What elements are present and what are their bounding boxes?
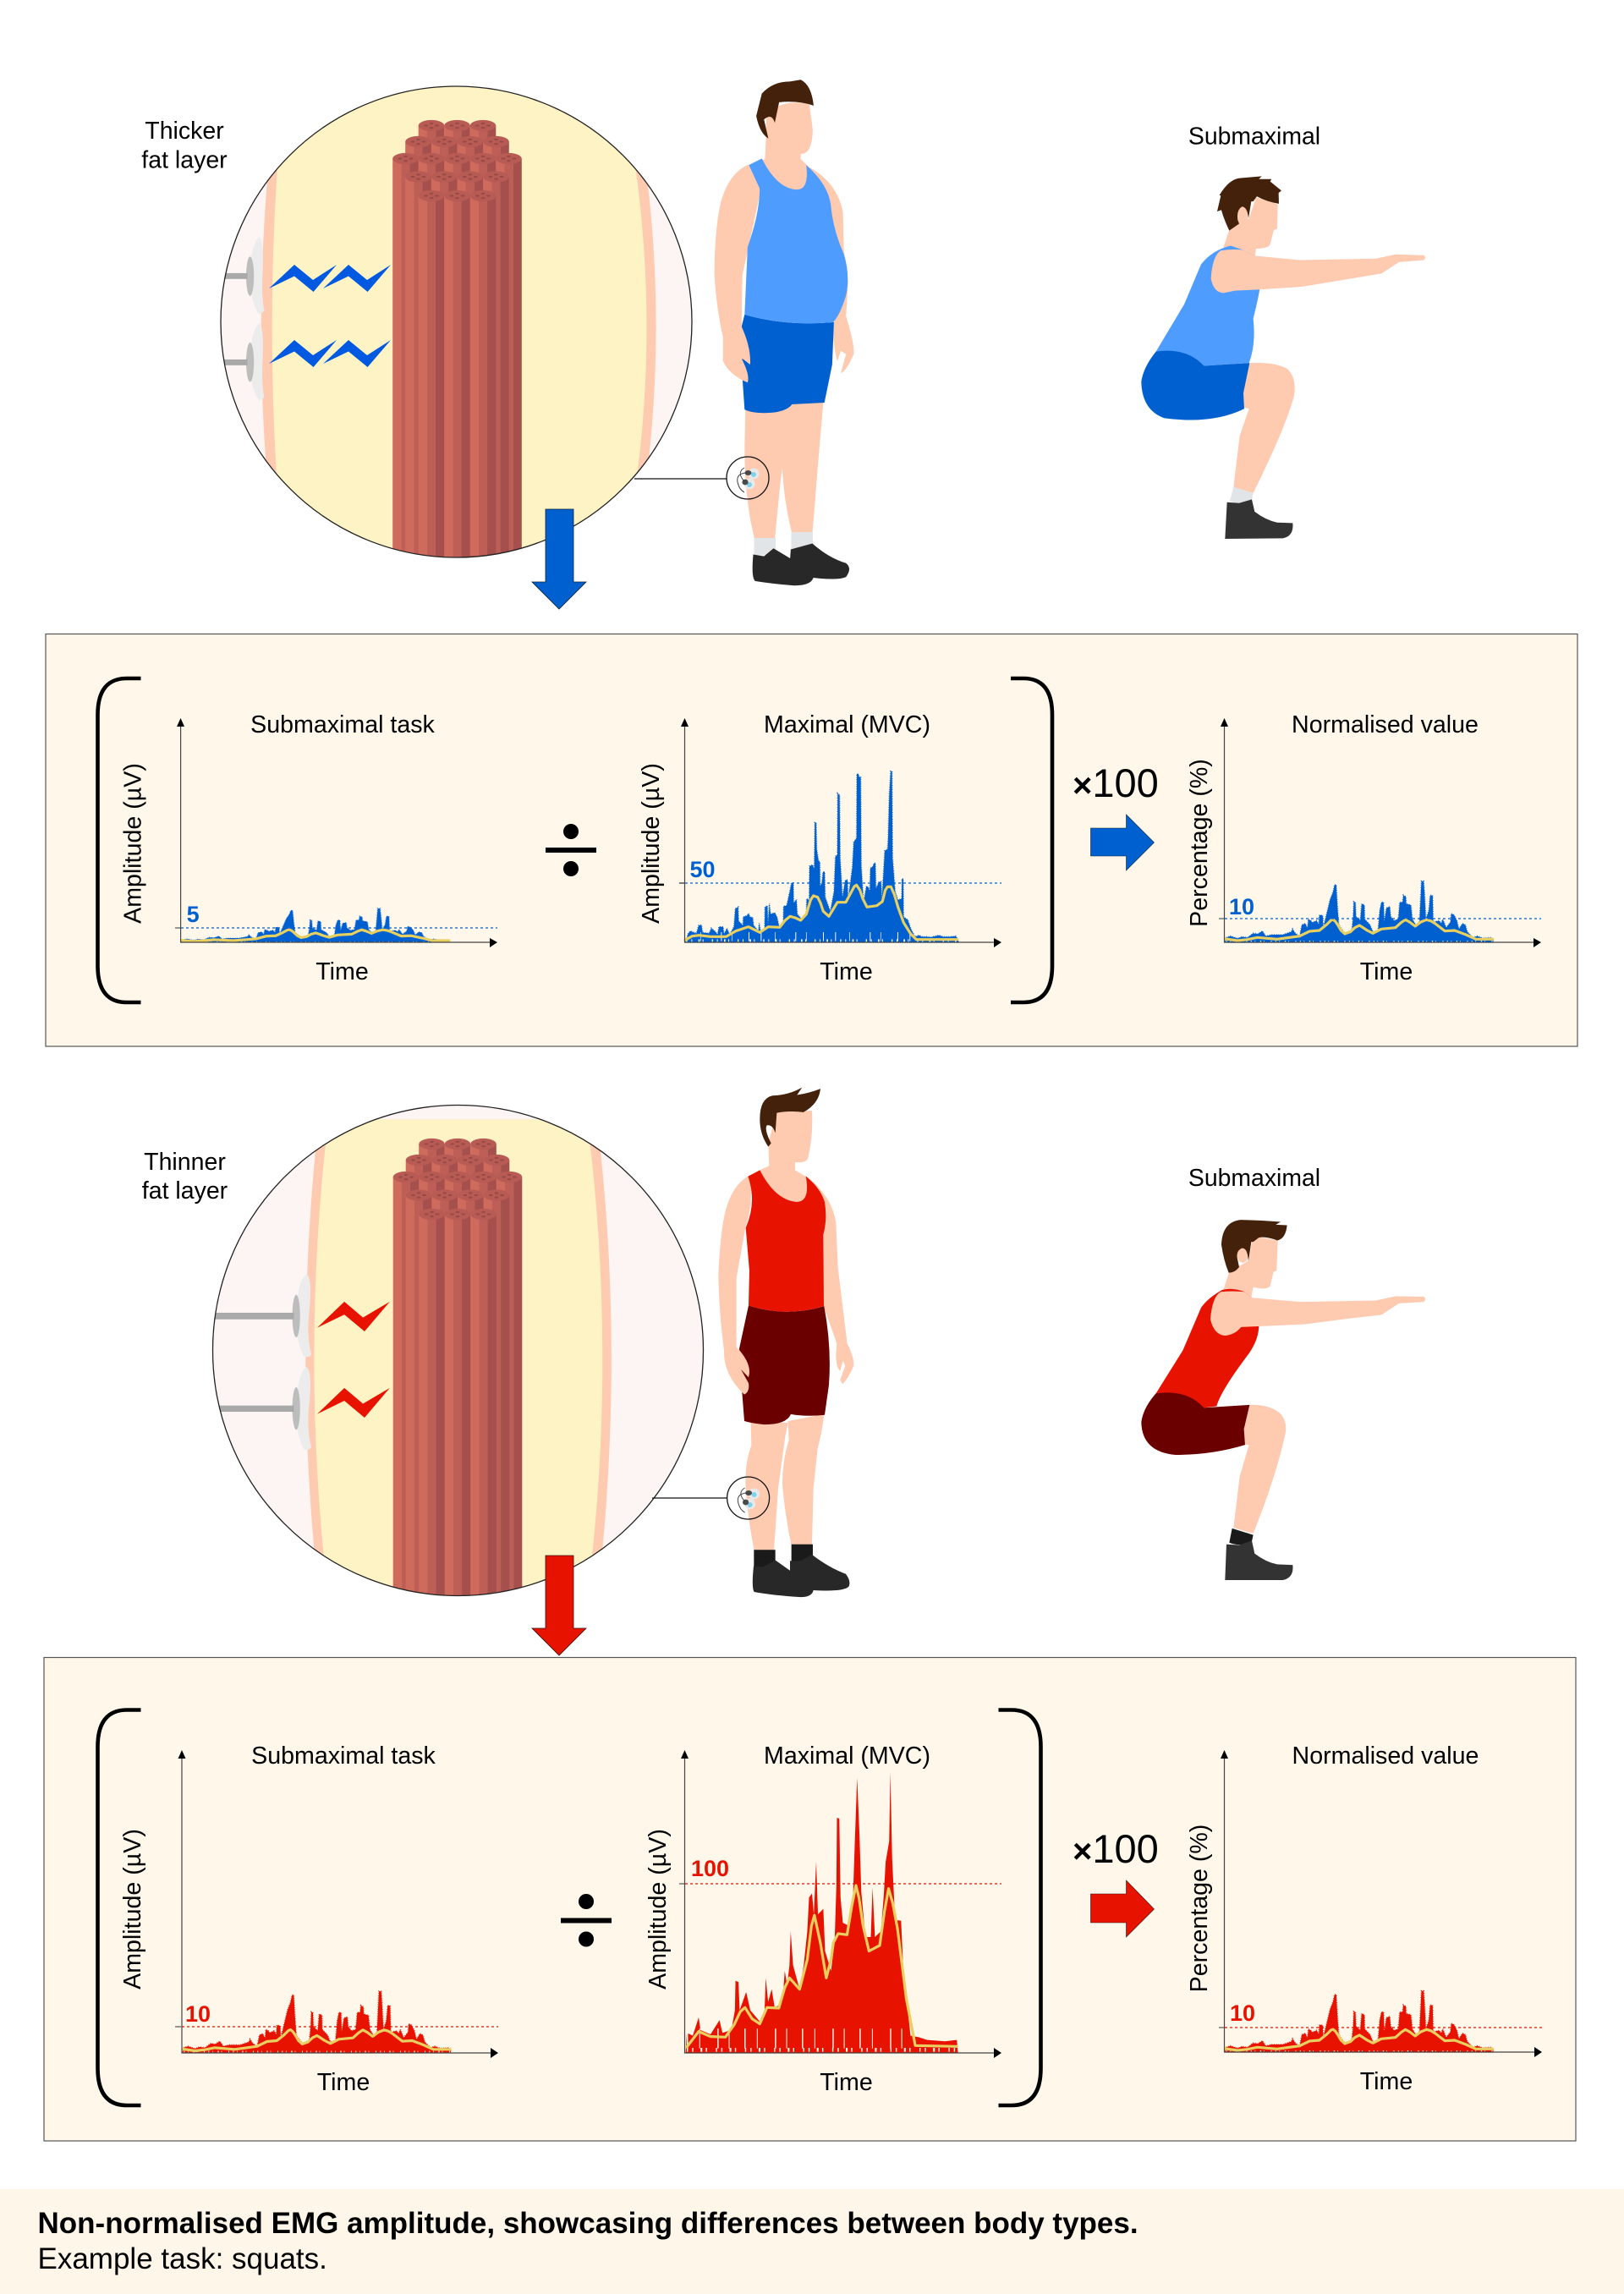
chart: normalised value, blue: Time <box>1360 958 1413 985</box>
callout: connector and sensor circle, bottom <box>652 1477 770 1519</box>
chart: submaximal task, blue: Amplitude (µV) <box>120 763 147 924</box>
arrow: blue down <box>532 509 586 609</box>
panel: top magnified muscle view, thicker fat layer <box>141 68 702 704</box>
chart: maximal MVC, red: 100 <box>691 1856 729 1881</box>
right bracket <box>998 1710 1040 2105</box>
panel: bottom magnified muscle view, thinner fat layer <box>142 1095 710 1722</box>
caption band <box>0 2189 1624 2294</box>
chart: submaximal task, blue: Time <box>315 958 369 985</box>
chart: maximal MVC, blue <box>638 711 1001 985</box>
chart: normalised value, red: Percentage (%) <box>1186 1825 1213 1992</box>
caption title: Non-normalised EMG amplitude, showcasing differences between body types. <box>37 2207 1138 2240</box>
chart: maximal MVC, red <box>645 1742 1001 2096</box>
label: thicker fat layer: fat layer <box>141 147 228 174</box>
chart: submaximal task, red: Time <box>317 2069 370 2096</box>
chart: normalised value, red <box>1186 1742 1542 2095</box>
chart: normalised value, blue <box>1186 711 1541 985</box>
chart: maximal MVC, red: Amplitude (µV) <box>645 1829 672 1989</box>
chart: submaximal task, blue <box>120 711 497 985</box>
heading: submaximal bottom: Submaximal <box>1188 1165 1320 1192</box>
callout: connector and sensor circle, top <box>634 457 769 499</box>
chart: maximal MVC, blue: Maximal (MVC) <box>764 711 930 738</box>
chart: maximal MVC, blue: 50 <box>690 857 716 882</box>
left bracket <box>98 1710 140 2105</box>
label: thinner fat layer: fat layer <box>142 1177 228 1205</box>
chart: normalised value, blue: 10 <box>1229 894 1254 919</box>
chart: normalised value, red: Time <box>1360 2068 1413 2095</box>
chart: maximal MVC, red: Time <box>820 2069 873 2096</box>
multiply by 100: ×100 <box>1073 760 1159 805</box>
chart: submaximal task, red: 10 <box>185 2001 211 2027</box>
multiply by 100: ×100 <box>1073 1826 1159 1871</box>
figure: standing man, blue kit <box>715 80 853 585</box>
right bracket <box>1011 678 1052 1002</box>
chart: normalised value, blue: Percentage (%) <box>1186 759 1213 927</box>
magnified tissue circle <box>211 1105 704 1597</box>
label: thinner fat layer: Thinner <box>144 1149 226 1176</box>
chart: submaximal task, red: Submaximal task <box>251 1742 436 1770</box>
icon: blue signal bolts <box>269 265 391 367</box>
chart: normalised value, red: Normalised value <box>1292 1742 1479 1770</box>
chart: submaximal task, red <box>119 1742 498 2096</box>
magnified tissue circle <box>220 85 693 558</box>
chart: maximal MVC, red: Maximal (MVC) <box>764 1742 930 1770</box>
chart: maximal MVC, blue: Time <box>820 958 873 985</box>
arrow: red right <box>1091 1880 1154 1937</box>
chart: normalised value, red: 10 <box>1230 2000 1255 2026</box>
chart: submaximal task, red: Amplitude (µV) <box>119 1829 146 1989</box>
caption subtitle: Example task: squats. <box>37 2242 327 2275</box>
panel: blue EMG equation <box>46 634 1577 1046</box>
figure: standing man, red kit <box>718 1088 853 1597</box>
divide sign, blue panel <box>546 824 596 876</box>
chart: normalised value, blue: Normalised value <box>1292 711 1479 738</box>
icon: red signal bolts <box>317 1302 390 1418</box>
divide sign, red panel <box>561 1894 612 1947</box>
arrow: blue right <box>1091 815 1154 870</box>
chart: submaximal task, blue: 5 <box>187 902 200 927</box>
figure: squatting man, red kit <box>1141 1220 1425 1580</box>
heading: submaximal top: Submaximal <box>1188 123 1320 151</box>
left bracket <box>98 678 140 1002</box>
figure: squatting man, blue kit <box>1141 176 1425 539</box>
label: thicker fat layer: Thicker <box>145 118 224 145</box>
chart: maximal MVC, blue: Amplitude (µV) <box>638 763 665 924</box>
chart: submaximal task, blue: Submaximal task <box>250 711 436 738</box>
arrow: red down <box>532 1556 586 1655</box>
panel: red EMG equation <box>44 1658 1576 2141</box>
